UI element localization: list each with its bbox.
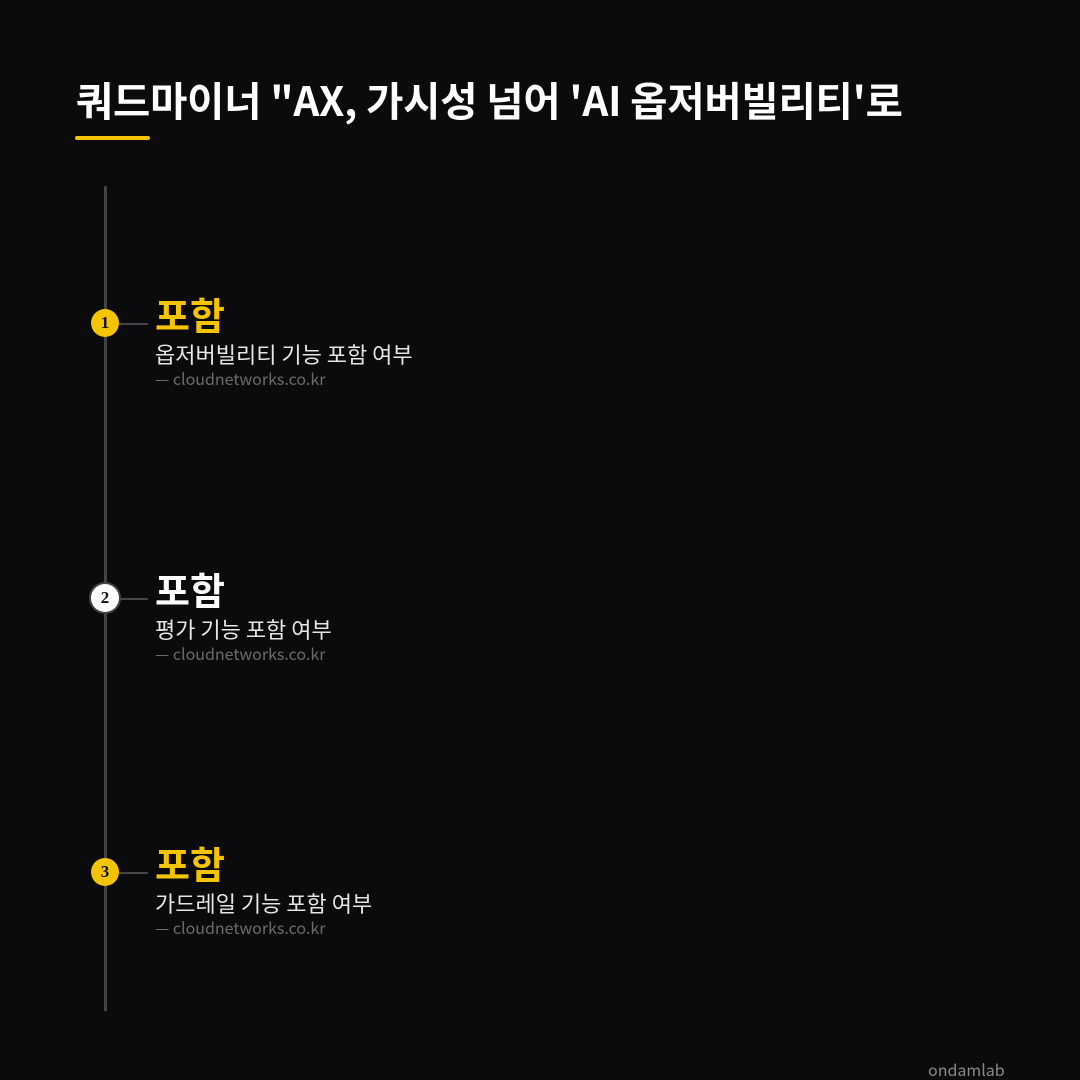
item 3: 포함 — [155, 835, 225, 890]
item 1 — [155, 286, 413, 390]
title underline — [75, 136, 150, 140]
timeline line — [104, 186, 107, 1011]
marker 3: 3 — [101, 862, 109, 881]
item 1: 옵저버빌리티 기능 포함 여부 — [155, 338, 413, 370]
item 2: 평가 기능 포함 여부 — [155, 613, 332, 645]
marker 1: 1 — [101, 313, 109, 332]
item 1: 포함 — [155, 286, 225, 341]
title: 쿼드마이너 "AX, 가시성 넘어 'AI 옵저버빌리티'로 — [76, 69, 903, 128]
marker 2 — [91, 584, 119, 612]
item 3: 가드레일 기능 포함 여부 — [155, 887, 372, 919]
item 1: — cloudnetworks.co.kr — [155, 366, 325, 390]
marker 3 — [91, 858, 119, 886]
item 2: 포함 — [155, 561, 225, 616]
item 2 — [155, 561, 332, 665]
item 2: — cloudnetworks.co.kr — [155, 641, 325, 665]
item 3 — [155, 835, 372, 939]
item 3: — cloudnetworks.co.kr — [155, 915, 325, 939]
marker 1 — [91, 309, 119, 337]
marker 2: 2 — [101, 588, 109, 607]
